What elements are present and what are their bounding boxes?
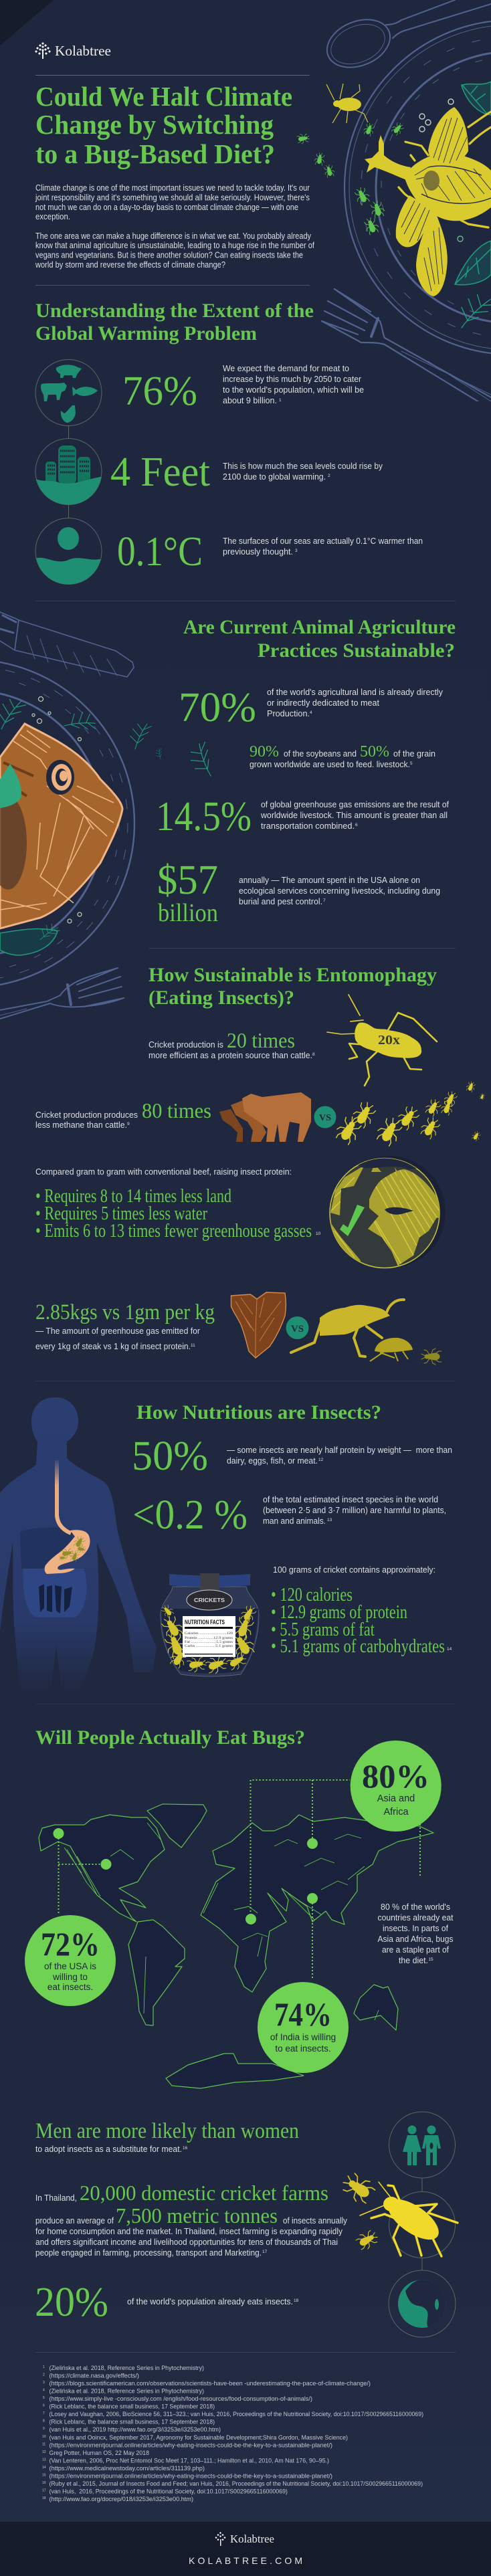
footer logo [215, 2532, 274, 2546]
references: (https://www.simply-live -consciously.com /english/food-resources/food-consumption-of-animals/) [50, 2395, 312, 2403]
text: agricultural land: Production. [267, 709, 310, 718]
intro paragraph 2 [35, 231, 314, 270]
text: greenhouse emissions: 6 [355, 823, 358, 827]
water [36, 476, 102, 504]
heading: entomophagy: How Sustainable is Entomophagy [149, 964, 437, 986]
jar strap [200, 1573, 219, 1594]
stat: 20 times: 8 [312, 1052, 315, 1057]
nutrition facts label [183, 1616, 235, 1657]
list: nutrition values: • 120 calories [271, 1585, 353, 1605]
illustration: plate with beetle, spoon and fork [320, 0, 491, 409]
sun [58, 527, 79, 550]
divider [35, 75, 310, 76]
text: 80% of countries: 15 [428, 1957, 433, 1962]
land [330, 1167, 439, 1266]
stat: 80 times: 80 times [142, 1098, 211, 1122]
heading: animal agriculture: Practices Sustainable? [258, 639, 455, 662]
stat: soybeans and grain: grown worldwide are used to feed. livestock. [250, 760, 410, 769]
list: nutrition values: • 5.5 grams of fat [271, 1619, 375, 1640]
reference numbers: 7 [43, 2411, 45, 2415]
callout: 72% USA: of the USA is [44, 1961, 96, 1971]
stat: soybeans and grain: 90% [250, 743, 279, 761]
icon: 20x cricket [327, 995, 437, 1086]
stat: 50%: 50% [132, 1433, 208, 1479]
icon: cow [41, 383, 67, 401]
references: (Losey and Vaughan, 2006, BioScience 56, 311–323.; van Huis, 2016, Proceedings of the Nutritional Society, doi:10.1017/S0029665116000069) [50, 2411, 423, 2418]
text: emissions per kg: — The amount of greenhouse gas emitted for [35, 1326, 200, 1336]
text: Thailand insect farming: produce an average of [35, 2216, 114, 2225]
text: sea surface: The surfaces of our seas are actually 0.1°C warmer than [223, 536, 423, 546]
text: cricket contents: 100 grams of cricket contains approximately: [273, 1565, 435, 1575]
dark sea patches [371, 1167, 400, 1181]
leaves and dill [455, 82, 491, 285]
north america [39, 1815, 165, 1922]
reference numbers: 8 [43, 2419, 45, 2423]
wordmark: Kolabtree [230, 2533, 274, 2545]
text: demand for meat: about 9 billion. [223, 396, 277, 405]
heading: animal agriculture: Are Current Animal Agriculture [183, 616, 456, 638]
text: emissions per kg: every 1kg of steak vs 1 kg of insect protein. [35, 1342, 191, 1351]
text: Thailand insect farming: people engaged in farming, processing, transport and Marketing. [35, 2248, 262, 2258]
intro paragraph 1: joint responsibility and it's something we should all take seriously. However, there's [35, 193, 310, 202]
stat: 76%: 76% [122, 369, 197, 414]
website: KOLABTREE.COM [189, 2555, 302, 2566]
intro paragraph 2: vegans and vegetarians. But is there another solution? Can eating insects take the [35, 250, 303, 260]
stat: 80 times [35, 1098, 211, 1130]
swarm of crickets [333, 1080, 486, 1148]
callout: 80% Asia and Africa [351, 1741, 441, 1831]
antarctica [166, 2054, 304, 2088]
heading: global warming: Understanding the Extent of the [35, 300, 314, 322]
list: insect protein benefits: • Emits 6 to 13 times fewer greenhouse gasses [35, 1221, 312, 1242]
text: 80% of countries [377, 1902, 454, 1965]
list: insect protein benefits: • Requires 5 times less water [35, 1203, 208, 1224]
text: 80% of countries: 80 % of the world's [381, 1902, 450, 1912]
text: 80% of countries: Asia and Africa, bugs [377, 1935, 454, 1944]
heading: global warming [35, 300, 314, 344]
basil leaf [0, 929, 58, 955]
nutrition facts label: Protein ..............12.9 grams [185, 1637, 233, 1640]
reference numbers: 13 [42, 2458, 46, 2462]
stat: soybeans and grain: of the grain [393, 749, 435, 759]
text: sea surface [223, 536, 423, 557]
text: emissions per kg: 11 [191, 1343, 195, 1348]
heading: entomophagy [149, 964, 437, 1009]
connector [68, 425, 69, 439]
icon: pig [56, 365, 82, 378]
text: 80% of countries: the diet. [399, 1956, 428, 1965]
references: (https://blogs.scientificamerican.com/observations/scientists-have-been -underestimating-the-pace-of-climate-change/) [50, 2380, 371, 2387]
stat: soybeans and grain: 50% [360, 743, 389, 761]
callout: 80% Asia and Africa: Asia and [377, 1793, 415, 1804]
reference numbers: 10 [42, 2435, 46, 2439]
stat: 80 times: 9 [127, 1122, 130, 1126]
greenland [147, 1804, 207, 1848]
buildings [45, 445, 90, 484]
text: half protein: — some insects are nearly half protein by weight — more than [227, 1446, 452, 1455]
crickets in jar [159, 1603, 258, 1676]
list: insect protein benefits [35, 1186, 321, 1242]
eurasia and africa [201, 1815, 433, 1992]
icon: chicken [61, 405, 76, 423]
spoon [326, 0, 491, 68]
stat: men vs women: Men are more likely than women [35, 2119, 299, 2143]
references: (Rick Leblanc, the balance small business, 17 September 2018) [50, 2419, 215, 2426]
text: 80% of countries: are a staple part of [382, 1945, 450, 1955]
heading: animal agriculture [183, 616, 456, 662]
callout: 74% India: 74% [274, 1995, 332, 2033]
references: (https://www.medicalnewstoday.com/articles/311139.php) [50, 2465, 205, 2472]
map hatching [64, 1823, 379, 2020]
wordmark: Kolabtree [55, 43, 111, 59]
title: to a Bug-Based Diet? [35, 138, 275, 169]
text: agricultural land: 4 [310, 710, 312, 715]
reference numbers: 5 [43, 2396, 45, 2400]
references: (Zielińska et al. 2018, Reference Series in Phytochemistry) [50, 2365, 204, 2372]
text: sea levels: 2100 due to global warming. [223, 472, 326, 482]
references [42, 2365, 423, 2503]
text: ecological services [239, 876, 440, 906]
bugs in stomach [59, 1534, 86, 1563]
oval label: CRICKETS [194, 1597, 225, 1603]
list: nutrition values: • 5.1 grams of carbohydrates [271, 1636, 445, 1657]
stat: 20%: 20% [35, 2280, 108, 2325]
jar lid [169, 1574, 250, 1587]
connector [421, 2258, 423, 2270]
dotted connector lines [59, 1780, 420, 1980]
stat: soybeans and grain: of the soybeans and [284, 749, 357, 759]
reference numbers: 1 [43, 2365, 45, 2369]
references: (van Huis and Ooincx, September 2017, Agronomy for Sustainable Development;Shira Gordon, Massive Science) [50, 2434, 348, 2442]
reference numbers: 9 [43, 2427, 45, 2431]
text: demand for meat: to the world's population, which will be [223, 385, 364, 395]
steak [0, 724, 122, 928]
references: (Van Lenteren, 2006, Proc Net Entomol Soc Meet 17, 103–111.; Hamilton et al., 2010, Am Nat 176, 90–95.) [50, 2457, 329, 2464]
beetle hatching [401, 118, 491, 291]
text: 80% of countries: countries already eat [377, 1913, 454, 1922]
stat: 80 times: Cricket production produces [35, 1110, 138, 1120]
stat: farms: 20,000 domestic cricket farms [80, 2181, 328, 2205]
text: half protein: 12 [318, 1458, 324, 1462]
beetle legs and antennae [399, 112, 491, 227]
text: demand for meat: We expect the demand for meat to [223, 364, 349, 373]
jar glass [161, 1587, 259, 1676]
divider [35, 2352, 456, 2353]
list: insect protein benefits: 10 [316, 1231, 321, 1236]
icon: check mark [340, 1205, 365, 1236]
nutrition facts label: Fat ........................5.5 grams [185, 1641, 233, 1644]
references: (http://www.fao.org/docrep/018/i3253e/i3253e00.htm) [50, 2496, 193, 2503]
dill sprigs [0, 698, 225, 946]
callout: 74% India [258, 1982, 349, 2073]
plate rings [345, 20, 491, 355]
callout: 72% USA: eat insects. [47, 1982, 93, 1992]
icon: people circle [389, 2112, 455, 2178]
stat: men vs women: to adopt insects as a substitute for meat. [35, 2145, 182, 2154]
text: agricultural land [267, 688, 444, 718]
text: harmful species: of the total estimated insect species in the world [263, 1495, 438, 1504]
references: (Ruby et al., 2015, Journal of Insects Food and Feed; van Huis, 2016, Proceedings of the Nutritional Society, doi:10.1017/S0029665116000069) [50, 2480, 423, 2488]
list: nutrition values: 14 [447, 1647, 452, 1652]
reference numbers: 17 [42, 2488, 46, 2492]
stat: 2.85kgs vs 1gm: 2.85kgs vs 1gm per kg [35, 1300, 215, 1324]
references: (van Huis et al., 2019 http://www.fao.org/3/i3253e/i3253e00.htm) [50, 2426, 221, 2434]
text: harmful species: 13 [327, 1518, 332, 1522]
text: Thailand insect farming [35, 2203, 348, 2258]
divider [149, 948, 456, 949]
heading: will people eat bugs: Will People Actually Eat Bugs? [35, 1726, 305, 1749]
stat: 80 times: less methane than cattle. [35, 1120, 127, 1130]
icon: 20x cricket: 20x [378, 1033, 400, 1048]
small beetle [326, 84, 368, 123]
large intestine [39, 1584, 72, 1613]
oval label [187, 1590, 232, 1610]
text: 80% of countries: insects. In parts of [383, 1924, 449, 1933]
intro paragraph 2: The one area we can make a huge difference is in what we eat. You probably already [35, 231, 312, 241]
text: Thailand insect farming: for home consumption and the market. In Thailand, insect farming is expanding rapidly [35, 2227, 343, 2236]
intro paragraph 2: know that animal agriculture is unsustainable, leading to a huge rise in the number of [35, 241, 314, 250]
callout: 80% Asia and Africa: 80% [362, 1757, 429, 1795]
icon: steak [231, 1292, 286, 1358]
heading: entomophagy: (Eating Insects)? [149, 987, 294, 1009]
text: greenhouse emissions [260, 800, 450, 831]
icon: hatched globe [328, 1155, 448, 1271]
badge: vs [286, 1316, 309, 1339]
reference numbers: 4 [43, 2389, 45, 2393]
intro paragraph 1: Climate change is one of the most important issues we need to tackle today. It's our [35, 183, 310, 193]
divider [35, 285, 310, 286]
badge: vs [314, 1106, 336, 1128]
icon: earth circle [389, 2270, 456, 2337]
windows [47, 451, 89, 474]
body silhouette [0, 1397, 157, 1692]
south america [128, 1920, 185, 2025]
references: (Rick Leblanc, the balance small business, 17 September 2018) [50, 2403, 215, 2411]
title: Change by Switching [35, 109, 274, 140]
stat: $57 billion: $57 [157, 858, 218, 903]
list: nutrition values [271, 1585, 452, 1657]
list: nutrition values: • 12.9 grams of protein [271, 1602, 407, 1623]
stat: 20 times: Cricket production is [149, 1040, 223, 1050]
footer [0, 2522, 491, 2576]
references: (https://climate.nasa.gov/effects/) [50, 2372, 139, 2380]
stat: 4 Feet: 4 Feet [110, 450, 210, 495]
liver [20, 1528, 72, 1569]
text: demand for meat: 1 [279, 398, 282, 403]
text: demand for meat: increase by this much by 2050 to cater [223, 375, 361, 384]
icon: woman [403, 2126, 421, 2165]
dill sprig [461, 294, 491, 328]
logo [35, 42, 111, 59]
icon: warm sea circle [33, 518, 104, 589]
references: (https://environmentjournal.online/articles/why-eating-insects-could-be-the-key-to-a-sustainable-planet/) [50, 2472, 332, 2480]
garnish circles [419, 99, 463, 241]
callout: 74% India: of India is willing [270, 2032, 336, 2042]
text: demand for meat [223, 364, 364, 405]
lower fork [0, 968, 124, 1019]
text: half protein: dairy, eggs, fish, or meat. [227, 1456, 318, 1466]
illustration: plate with steak, knife and fork [0, 612, 225, 1019]
icon: farm animals circle [35, 360, 102, 425]
icon: fish [72, 387, 98, 396]
nutrition facts label: Carbs ..................5.1 grams [185, 1645, 233, 1648]
text: agricultural land: of the world's agricultural land is already directly [267, 688, 444, 697]
connector [68, 505, 69, 518]
reference numbers: 14 [42, 2466, 46, 2470]
callout: 72% USA: 72% [41, 1925, 100, 1963]
reference numbers: 18 [42, 2496, 46, 2500]
beetle wings and body [365, 107, 491, 296]
callout: 80% Asia and Africa: Africa [383, 1807, 409, 1817]
icon: big bug [291, 1300, 404, 1357]
text: sea surface: 3 [295, 549, 298, 553]
callout: 72% USA [25, 1915, 116, 2006]
esophagus [57, 1460, 71, 1533]
reference numbers: 15 [42, 2473, 46, 2477]
references: (van Huis, 2016, Proceedings of the Nutritional Society, doi:10.1017/S0029665116000069) [50, 2488, 288, 2495]
callout: 72% USA: willing to [52, 1972, 88, 1982]
stat: soybeans and grain: 5 [410, 761, 413, 766]
stat: men vs women [35, 2119, 299, 2154]
reference numbers: 11 [42, 2442, 45, 2446]
text: emissions per kg [35, 1326, 200, 1351]
text: Thailand insect farming: 17 [262, 2250, 268, 2254]
stat: 14.5%: 14.5% [156, 794, 252, 839]
text: harmful species: (between 2·5 and 3·7 million) are harmful to plants, [263, 1506, 446, 1515]
stat: 0.1C: 0.1°C [117, 529, 203, 575]
nutrition facts label: NUTRITION FACTS [185, 1619, 225, 1626]
stomach [45, 1530, 90, 1574]
fork [322, 289, 491, 409]
icon: tree [35, 42, 51, 59]
text: ecological services: 7 [323, 898, 326, 903]
stat: men vs women: 16 [183, 2146, 188, 2151]
icon: cricket circle [360, 2182, 458, 2258]
text: greenhouse emissions: transportation combined. [261, 821, 355, 831]
stat: less than 0.2%: <0.2 % [132, 1492, 248, 1538]
world map [39, 1804, 433, 2088]
illustration: jar of crickets [159, 1573, 259, 1676]
intro paragraph 2: world by storm and reverse the effects of climate change? [35, 260, 225, 270]
stat: 20 times: 20 times [227, 1028, 295, 1052]
text: sea levels [223, 462, 383, 482]
icon: cows [219, 1092, 311, 1142]
badge: vs: VS [319, 1113, 331, 1123]
intro paragraph 1 [35, 183, 310, 221]
icon: tree [215, 2532, 226, 2546]
stat: 20 times [149, 1028, 315, 1060]
steak shading [0, 796, 27, 890]
references: (https://environmentjournal.online/articles/why-eating-insects-could-be-the-key-to-a-sustainable-planet/) [50, 2442, 332, 2449]
text: sea levels: 2 [328, 474, 330, 478]
mint leaf [0, 764, 21, 808]
title: Could We Halt Climate [35, 81, 292, 112]
connector [421, 2178, 423, 2192]
reference numbers: 3 [43, 2381, 45, 2385]
reference numbers: 6 [43, 2404, 45, 2408]
steak marbling [0, 730, 114, 910]
corner triangle [0, 0, 54, 45]
callout: 74% India: to eat insects. [275, 2044, 331, 2054]
illustration: human body with digestive system [0, 1397, 157, 1692]
nutrition facts label: Calories ..........................120 [185, 1632, 233, 1636]
text: harmful species [263, 1495, 446, 1526]
reference numbers: 12 [42, 2450, 46, 2454]
text: Thailand insect farming: and offers significant income and livelihood opportunities for tens of thousands of Thai [35, 2238, 338, 2247]
stat: soybeans and grain [250, 743, 435, 769]
icon: man [422, 2126, 441, 2165]
heading: global warming: Global Warming Problem [35, 322, 257, 344]
icon: small crickets [338, 2169, 380, 2252]
reference numbers: 2 [43, 2373, 45, 2377]
text: world population: of the world's population already eats insects. [127, 2297, 293, 2306]
icon: rising sea city circle [33, 439, 104, 508]
sea [36, 558, 100, 585]
text: sea levels: This is how much the sea levels could rise by [223, 462, 383, 471]
text: world population: 18 [294, 2298, 299, 2303]
steak bone [46, 760, 74, 795]
references: (Zielińska et al. 2018, Reference Series in Phytochemistry) [50, 2388, 204, 2395]
green ants around the plate [296, 121, 405, 235]
lower plate rings [0, 660, 134, 987]
australia [354, 1985, 398, 2030]
stat: 70%: 70% [179, 685, 256, 730]
intro paragraph 1: not much we can do on a day-to-day basis to combat climate change — with one [35, 203, 298, 212]
stat: $57 billion [157, 858, 218, 927]
map location dots [54, 1828, 318, 1924]
references: Greg Potter, Human OS, 22 May 2018 [50, 2450, 149, 2457]
stat: $57 billion: billion [158, 899, 218, 927]
text: gram to gram: Compared gram to gram with conventional beef, raising insect protein: [35, 1167, 292, 1177]
text: ecological services: annually — The amount spent in the USA alone on [239, 876, 420, 885]
text: greenhouse emissions: worldwide livestock. This amount is greater than all [260, 811, 448, 820]
knife [0, 612, 134, 677]
title [35, 81, 292, 169]
intestines [23, 1569, 87, 1617]
intro paragraph 1: exception. [35, 212, 70, 221]
text: ecological services: ecological services concerning livestock, including dung [239, 886, 440, 896]
text: harmful species: man and animals. [263, 1516, 326, 1526]
text: half protein [227, 1446, 452, 1466]
stat: farms: In Thailand, [35, 2193, 77, 2203]
text: Thailand insect farming: 7,500 metric tonnes [116, 2203, 278, 2227]
reference numbers [42, 2365, 46, 2500]
text: ecological services: burial and pest control. [239, 897, 322, 906]
icon: tiny bug [421, 1349, 441, 1365]
text: greenhouse emissions: of global greenhouse gas emissions are the result of [261, 800, 450, 809]
icon: medium bug [370, 1338, 413, 1361]
badge: vs: VS [291, 1324, 304, 1334]
heading: nutrition: How Nutritious are Insects? [136, 1401, 381, 1423]
garnish circles [32, 697, 82, 923]
text: Thailand insect farming: of insects annually [283, 2216, 348, 2225]
reference numbers: 16 [42, 2481, 46, 2485]
list: insect protein benefits: • Requires 8 to 14 times less land [35, 1186, 231, 1207]
text: agricultural land: or indirectly dedicated to meat [267, 698, 380, 708]
text: sea surface: previously thought. [223, 547, 293, 557]
stat: 20 times: more efficient as a protein source than cattle. [149, 1051, 312, 1060]
